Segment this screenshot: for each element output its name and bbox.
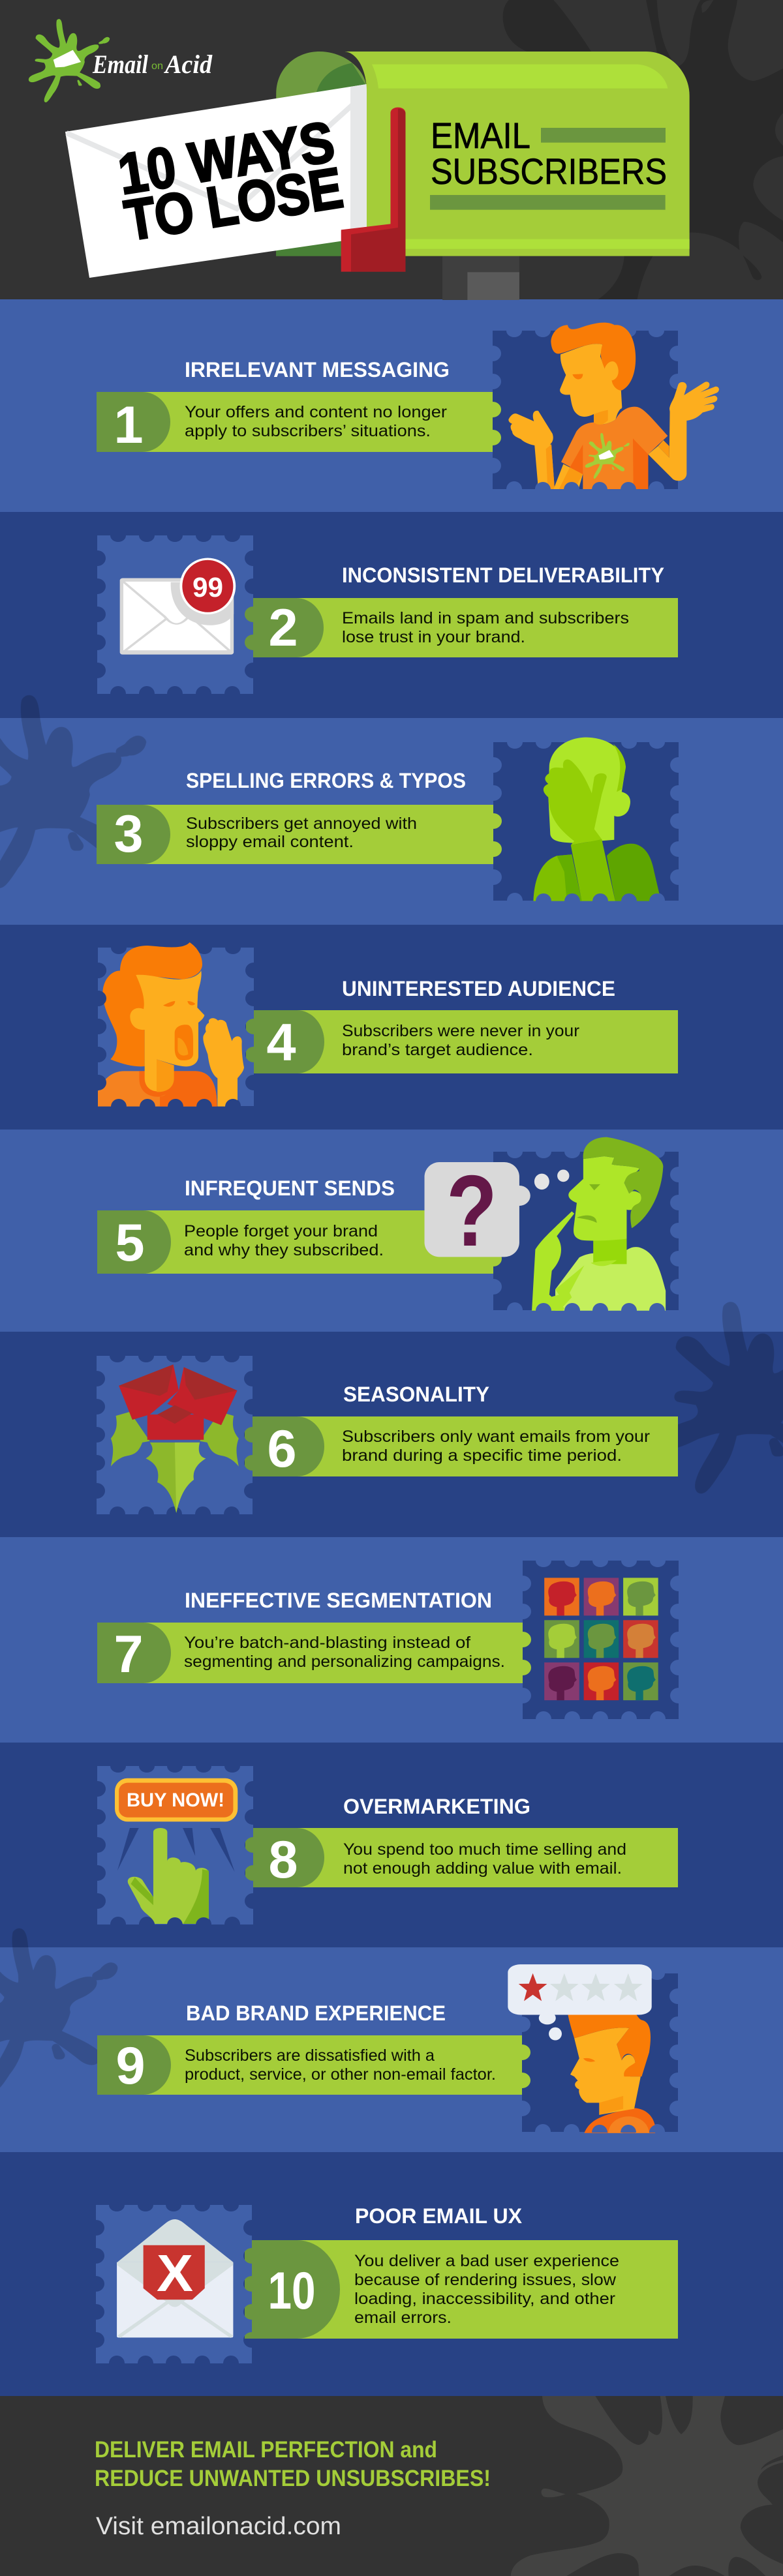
title 7: INEFFECTIVE SEGMENTATION — [185, 1589, 492, 1612]
bar 7 — [97, 1623, 532, 1683]
icon: facepalming green man — [533, 738, 659, 901]
bar 9 — [97, 2035, 532, 2095]
mailbox back and opening — [276, 52, 367, 256]
thought bubble with question mark — [425, 1154, 569, 1267]
bar 5 — [97, 1210, 503, 1274]
stamp side and bottom scallops — [98, 963, 241, 1107]
panel 1: irrelevant messaging — [97, 323, 719, 490]
panel 5: infrequent sends — [97, 1137, 679, 1311]
description 10: because of rendering issues, slow — [354, 2271, 617, 2289]
description 9 — [185, 2046, 496, 2084]
description 3: Subscribers get annoyed with — [186, 815, 417, 833]
logo wordmark: Acid — [163, 50, 213, 79]
panel 7: ineffective segmentation — [97, 1561, 679, 1719]
description 7 — [184, 1634, 505, 1671]
mailbox front — [344, 52, 690, 256]
rating bubble with stars — [508, 1964, 652, 2040]
bar 6 — [245, 1416, 678, 1476]
description 4 — [342, 1022, 579, 1059]
panel 8: overmarketing — [97, 1766, 678, 1925]
bar 2 — [245, 598, 678, 657]
panel 3: spelling errors and typos — [97, 738, 679, 901]
icon: shrugging orange man — [508, 323, 719, 489]
logo: Email on Acid — [29, 20, 213, 101]
mailbox illustration — [65, 52, 690, 300]
title 10: POOR EMAIL UX — [355, 2204, 523, 2228]
number 5: 5 — [115, 1214, 145, 1272]
envelope with title — [65, 84, 367, 278]
description 10: loading, inaccessibility, and other — [354, 2290, 615, 2308]
number 9: 9 — [115, 2037, 146, 2095]
panel 2: inconsistent deliverability — [97, 535, 678, 694]
description 7: segmenting and personalizing campaigns. — [184, 1653, 505, 1671]
description 5: People forget your brand — [184, 1222, 378, 1240]
stamp 3 — [493, 742, 679, 901]
cta heading: REDUCE UNWANTED UNSUBSCRIBES! — [95, 2466, 491, 2491]
description 6 — [342, 1428, 650, 1465]
title 4: UNINTERESTED AUDIENCE — [342, 977, 615, 1000]
envelope with title: 10 WAYS — [114, 109, 339, 207]
title 1: IRRELEVANT MESSAGING — [185, 358, 450, 382]
number 1: 1 — [114, 396, 144, 455]
icon: thinking green man — [532, 1137, 666, 1311]
icon: envelope with 99 badge — [120, 558, 236, 655]
description 6: Subscribers only want emails from your — [342, 1428, 650, 1446]
stamp 6 — [97, 1356, 253, 1514]
icon: grid of nine silhouettes — [544, 1578, 658, 1700]
description 3 — [186, 815, 417, 851]
description 2: Emails land in spam and subscribers — [342, 609, 629, 627]
cta heading: DELIVER EMAIL PERFECTION and — [95, 2437, 437, 2463]
stamp 10 — [96, 2205, 252, 2363]
title 6: SEASONALITY — [343, 1383, 489, 1406]
panel 4: uninterested audience — [98, 942, 678, 1107]
icon: green splat with envelope — [29, 20, 109, 101]
title 3: SPELLING ERRORS & TYPOS — [186, 769, 466, 792]
header background splat — [503, 0, 783, 299]
logo wordmark: Email — [92, 50, 149, 79]
footer background splat — [511, 2396, 783, 2576]
bar 10 — [245, 2240, 678, 2339]
title 5: INFREQUENT SENDS — [185, 1176, 395, 1200]
description 9: product, service, or other non-email factor. — [185, 2065, 496, 2084]
number 3: 3 — [114, 805, 144, 863]
cta heading — [95, 2437, 491, 2491]
bar 3 — [97, 805, 502, 864]
icon: envelope with red X shield: X — [157, 2244, 193, 2302]
description 5 — [184, 1222, 384, 1259]
number 2: 2 — [268, 599, 298, 657]
description 1 — [185, 403, 447, 440]
badge number: 99 — [192, 572, 223, 603]
stamp 9 — [522, 1973, 678, 2132]
icon: buy now button and pointing hand: BUY NOW! — [127, 1790, 224, 1811]
stamp bottom scallops — [110, 1917, 240, 1925]
stamp bottom scallops — [507, 1303, 665, 1311]
description 8 — [343, 1840, 626, 1878]
icon: yawning orange man — [98, 942, 244, 1107]
panel 10: poor email UX — [96, 2204, 678, 2363]
number 6: 6 — [267, 1420, 297, 1478]
stamp bottom scallops — [507, 893, 665, 901]
heading: email subscribers — [431, 115, 667, 192]
description 10: email errors. — [354, 2309, 452, 2327]
stamp 4 — [98, 948, 254, 1106]
description 2: lose trust in your brand. — [342, 628, 525, 646]
stamp 1 — [493, 331, 678, 489]
mailbox post — [442, 256, 519, 300]
background splats — [0, 700, 783, 2087]
number 7: 7 — [114, 1625, 144, 1684]
footer call to action — [95, 2437, 491, 2540]
title 9: BAD BRAND EXPERIENCE — [186, 2001, 446, 2025]
description 9: Subscribers are dissatisfied with a — [185, 2046, 435, 2065]
description 6: brand during a specific time period. — [342, 1446, 622, 1465]
icon: holly and red bow — [111, 1364, 239, 1513]
description 1: apply to subscribers’ situations. — [185, 422, 431, 440]
logo wordmark — [92, 50, 213, 79]
stamp 2 — [97, 535, 253, 694]
description 2 — [342, 609, 629, 646]
number 8: 8 — [268, 1831, 298, 1889]
stamp 5 — [493, 1152, 679, 1310]
title 2: INCONSISTENT DELIVERABILITY — [342, 563, 664, 587]
description 4: Subscribers were never in your — [342, 1022, 579, 1040]
stamp bottom scallops — [535, 2125, 665, 2133]
description 8: You spend too much time selling and — [343, 1840, 626, 1859]
title 8: OVERMARKETING — [343, 1795, 530, 1818]
description 7: You’re batch-and-blasting instead of — [184, 1634, 470, 1652]
bar 4 — [246, 1010, 678, 1073]
description 1: Your offers and content no longer — [185, 403, 447, 421]
description 8: not enough adding value with email. — [343, 1859, 622, 1878]
description 4: brand’s target audience. — [342, 1041, 533, 1059]
heading: email subscribers: EMAIL — [431, 115, 530, 156]
heading: email subscribers: SUBSCRIBERS — [431, 151, 667, 192]
icon: envelope with red X shield — [117, 2219, 233, 2337]
bar 1 — [97, 392, 502, 452]
panel 9: bad brand experience — [97, 1964, 678, 2133]
number 10: 10 — [268, 2262, 316, 2320]
stamp 8 — [97, 1766, 253, 1925]
stamp bottom scallops — [506, 482, 664, 490]
bar 8 — [245, 1828, 678, 1887]
description 10: You deliver a bad user experience — [354, 2252, 619, 2270]
description 3: sloppy email content. — [186, 833, 354, 851]
logo wordmark: on — [151, 61, 163, 72]
icon: unhappy orange man — [568, 2004, 655, 2133]
stamp 7 — [523, 1561, 679, 1719]
icon: buy now button and pointing hand — [115, 1778, 238, 1924]
envelope with title: TO LOSE — [120, 155, 347, 253]
panel 6: seasonality — [97, 1356, 678, 1514]
description 10 — [354, 2252, 619, 2327]
header background — [0, 0, 783, 299]
number 4: 4 — [266, 1013, 296, 1072]
website link text: Visit emailonacid.com — [96, 2513, 341, 2540]
thought bubble with question mark: ? — [446, 1154, 497, 1267]
description 5: and why they subscribed. — [184, 1241, 384, 1259]
mailbox red flag — [341, 108, 405, 272]
